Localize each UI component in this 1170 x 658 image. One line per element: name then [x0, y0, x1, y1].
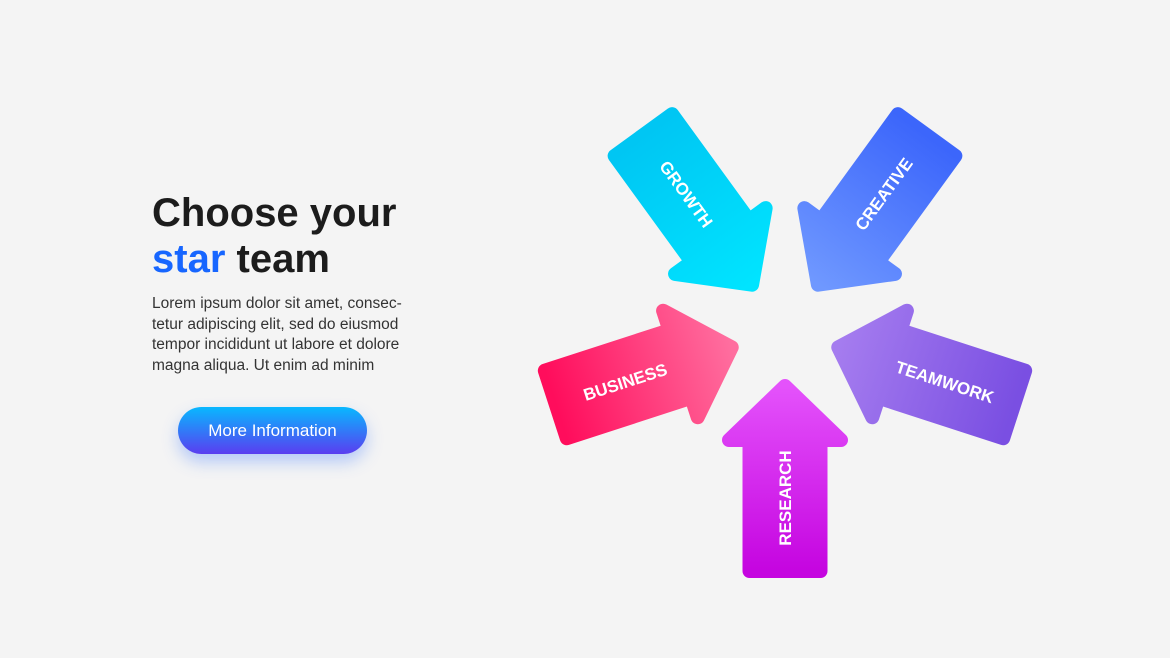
- title: Choose your: [152, 191, 396, 235]
- arrow: teamwork: [821, 294, 1032, 458]
- arrow: business: [538, 294, 749, 458]
- arrow: growth: GROWTH: [655, 157, 716, 231]
- arrow: research: RESEARCH: [776, 450, 795, 546]
- paragraph: tetur adipiscing elit, sed do eiusmod: [152, 316, 398, 332]
- paragraph: Lorem ipsum dolor sit amet, consec-: [152, 295, 402, 312]
- paragraph: magna aliqua. Ut enim ad minim: [152, 356, 374, 374]
- arrow: creative: [773, 102, 972, 318]
- button: More Information: [208, 421, 337, 440]
- title: star team: [152, 237, 330, 281]
- arrow: business: BUSINESS: [581, 360, 670, 405]
- button: [178, 407, 367, 454]
- arrow: creative: CREATIVE: [852, 155, 917, 234]
- arrow: growth: [598, 102, 797, 318]
- title: [152, 191, 396, 281]
- arrow: research: [729, 386, 841, 571]
- paragraph: tempor incididunt ut labore et dolore: [152, 336, 399, 353]
- paragraph: [152, 295, 402, 374]
- arrow: teamwork: TEAMWORK: [893, 358, 997, 407]
